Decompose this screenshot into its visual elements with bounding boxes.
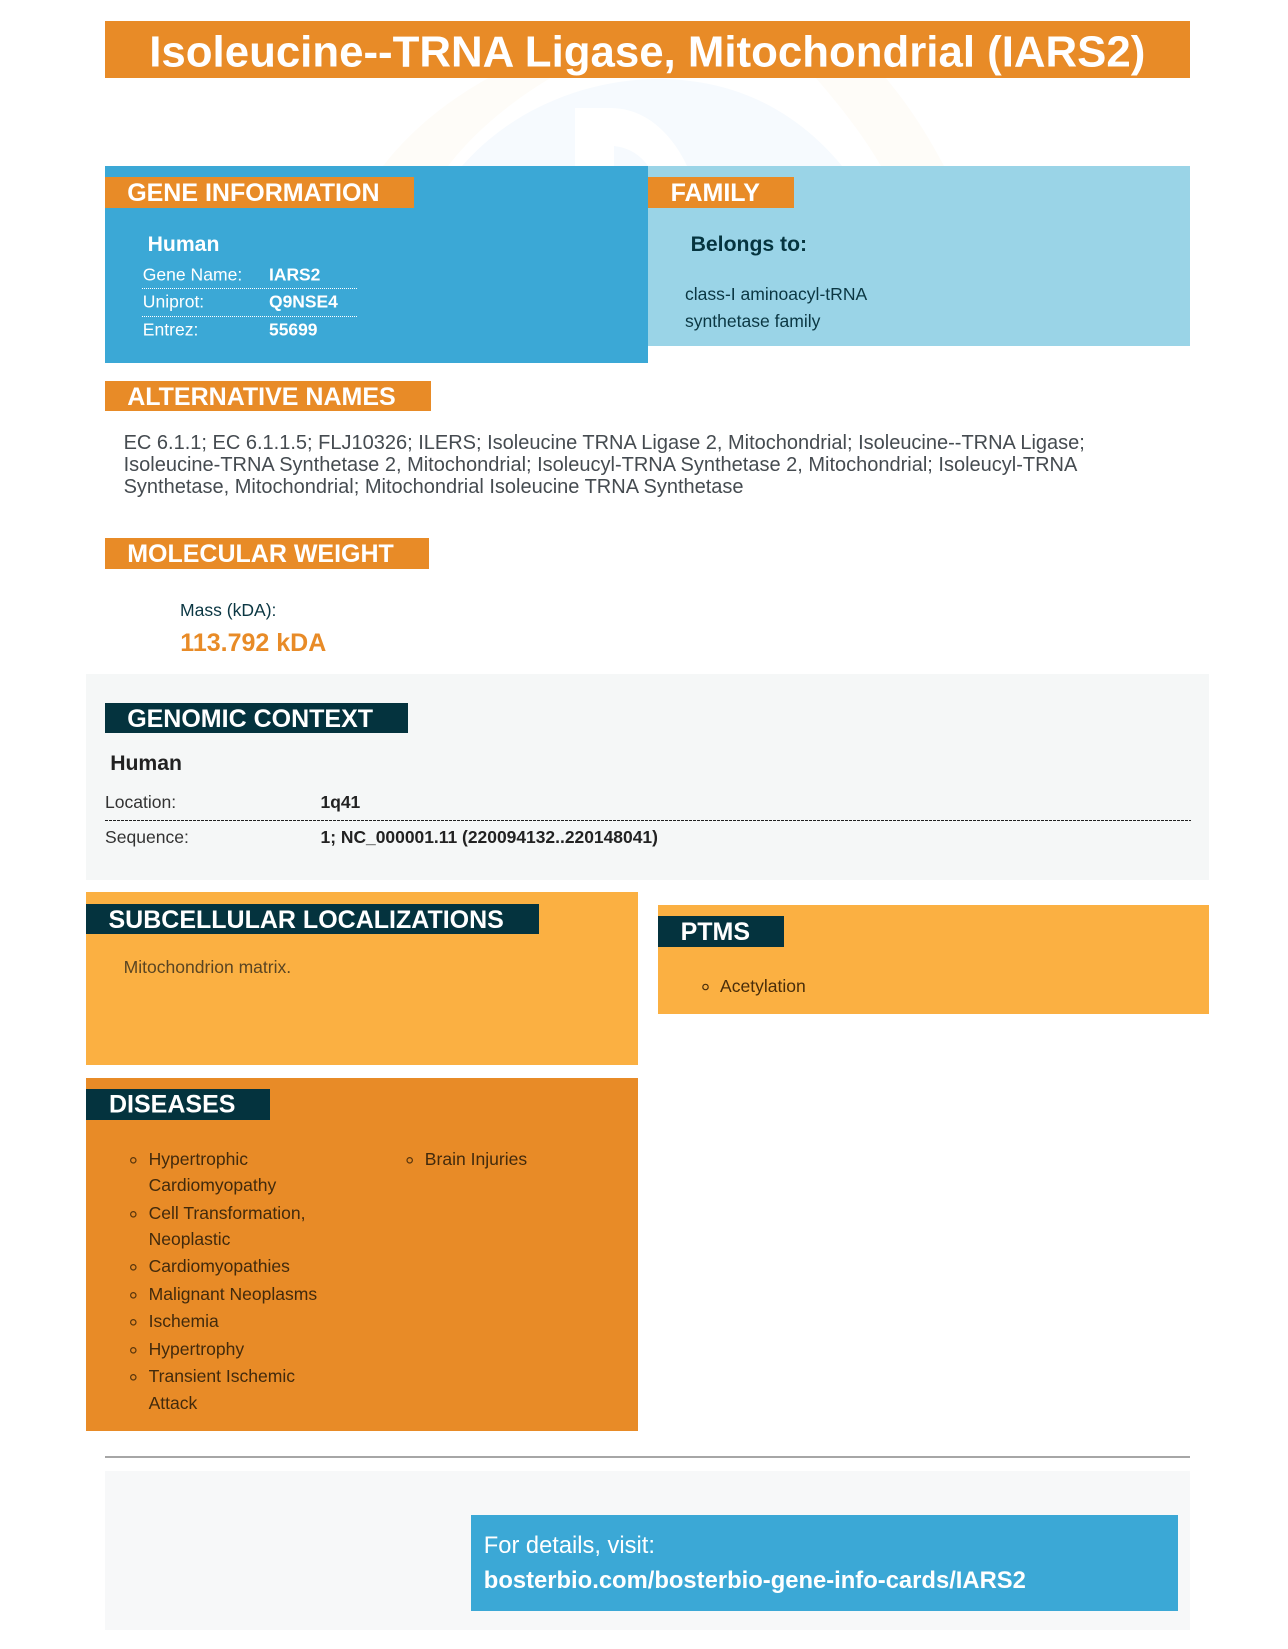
list: diseases: Hypertrophy	[149, 1339, 244, 1359]
sequence row: Sequence:	[105, 827, 189, 847]
entrez row	[143, 320, 318, 340]
entrez row: 55699	[269, 320, 318, 340]
callout: details link: For details, visit:	[484, 1533, 655, 1559]
location row: Location:	[105, 792, 176, 812]
heading: family	[648, 177, 794, 208]
sequence row	[105, 827, 658, 847]
callout: details link	[471, 1515, 1178, 1611]
heading: ptms	[658, 916, 784, 947]
heading: family: FAMILY	[671, 179, 760, 207]
text: alternative names: Synthetase, Mitochondrial; Mitochondrial Isoleucine TRNA Synthetase	[124, 476, 744, 498]
list: diseases: Attack	[149, 1393, 198, 1413]
panel: genomic context	[86, 674, 1209, 880]
list: diseases: Cell Transformation,	[149, 1203, 305, 1223]
text: human: Human	[148, 233, 219, 256]
list: diseases: Neoplastic	[149, 1229, 231, 1249]
heading: gene information: GENE INFORMATION	[127, 179, 380, 207]
gene name row	[143, 265, 320, 285]
list: ptms: Acetylation	[720, 976, 806, 996]
sequence row: 1; NC_000001.11 (220094132..220148041)	[320, 827, 658, 847]
list: diseases: Cardiomyopathy	[149, 1175, 276, 1195]
location row	[105, 792, 361, 812]
text: alternative names	[124, 432, 1085, 498]
heading: genomic context: GENOMIC CONTEXT	[127, 705, 373, 733]
text: alternative names: EC 6.1.1; EC 6.1.1.5; FLJ10326; ILERS; Isoleucine TRNA Ligase 2, Mitochondrial; Isoleucine--TRNA Ligase;	[124, 432, 1085, 454]
list: diseases: Hypertrophic	[149, 1149, 248, 1169]
text: mass value: 113.792 kDA	[180, 629, 326, 657]
text: family description	[685, 284, 867, 331]
gene name row: Gene Name:	[143, 265, 242, 285]
panel: footer	[105, 1471, 1190, 1630]
uniprot row	[143, 292, 338, 312]
location row: 1q41	[320, 792, 361, 812]
callout: details link: bosterbio.com/bosterbio-gene-info-cards/IARS2	[484, 1567, 1026, 1594]
text: mass label: Mass (kDA):	[180, 600, 276, 620]
panel: diseases	[86, 1078, 638, 1431]
heading: diseases	[86, 1089, 270, 1120]
panel: subcellular localizations	[86, 892, 638, 1065]
text: human: Human	[110, 752, 182, 775]
panel: gene information	[105, 166, 648, 363]
heading: subcellular localizations: SUBCELLULAR LOCALIZATIONS	[108, 906, 504, 934]
entrez row: Entrez:	[143, 320, 198, 340]
text: localization: Mitochondrion matrix.	[124, 957, 291, 977]
gene name row: IARS2	[269, 265, 320, 285]
text: family description: synthetase family	[685, 311, 821, 331]
heading: alternative names: ALTERNATIVE NAMES	[127, 383, 396, 411]
list: diseases: Transient Ischemic	[149, 1366, 295, 1386]
watermark logo	[383, 70, 944, 166]
text: belongs to: Belongs to:	[691, 233, 807, 256]
uniprot row: Q9NSE4	[269, 292, 338, 312]
panel: family	[648, 166, 1190, 346]
list: diseases: Brain Injuries	[425, 1149, 527, 1169]
heading: diseases: DISEASES	[109, 1091, 235, 1119]
title: Isoleucine--TRNA Ligase, Mitochondrial (IARS2)	[149, 28, 1145, 76]
list: diseases: Cardiomyopathies	[149, 1256, 290, 1276]
list: diseases	[131, 1149, 527, 1413]
list: diseases: Malignant Neoplasms	[149, 1284, 317, 1304]
heading: ptms: PTMS	[681, 918, 750, 946]
text: family description: class-I aminoacyl-tRNA	[685, 284, 867, 304]
panel: ptms	[658, 905, 1209, 1014]
text: alternative names: Isoleucine-TRNA Synthetase 2, Mitochondrial; Isoleucyl-TRNA Synthetase 2, Mitochondrial; Isoleucyl-TRNA	[124, 454, 1078, 476]
list: diseases: Ischemia	[149, 1311, 219, 1331]
uniprot row: Uniprot:	[143, 292, 204, 312]
heading: molecular weight: MOLECULAR WEIGHT	[127, 540, 394, 568]
